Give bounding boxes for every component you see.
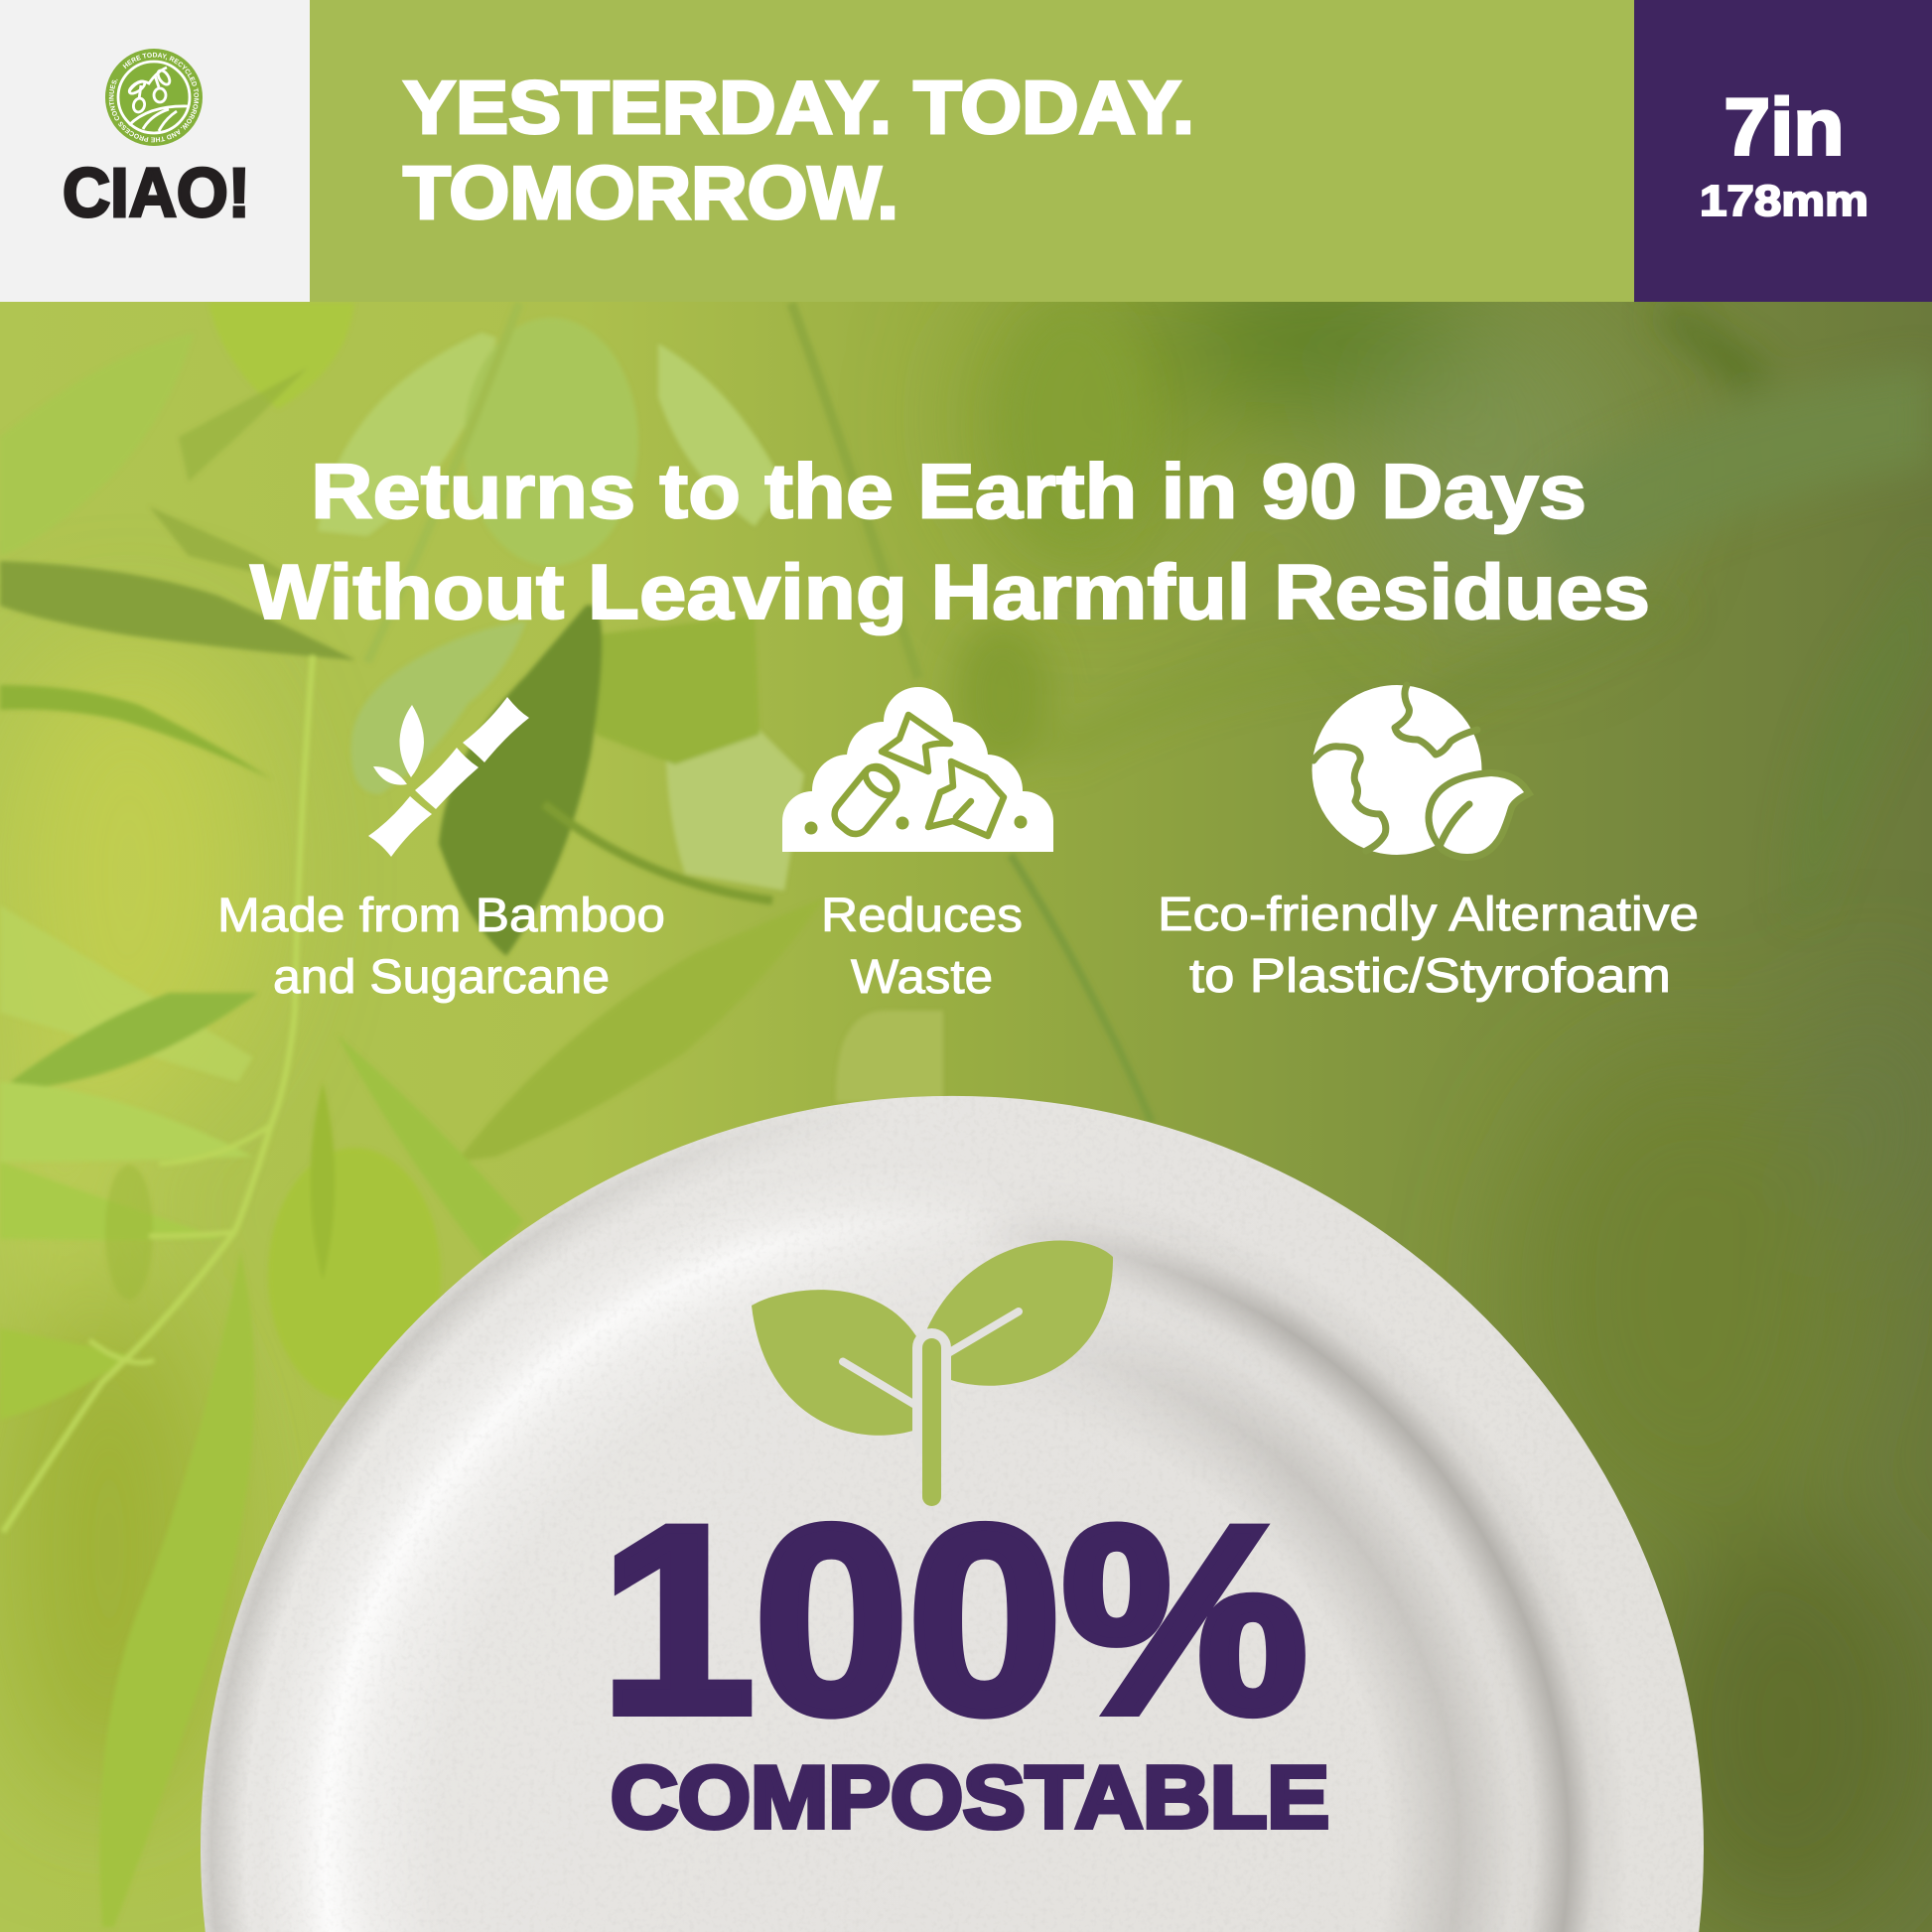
main heading: Returns to the Earth in 90 Days [311,447,1587,534]
label: made from bamboo and sugarcane: Made from Bamboo [217,890,665,942]
logo badge: HERE TODAY, RECYCLED TOMORROW. AND THE PROCESS CONTINUES. [109,52,199,143]
header panel: slogan: YESTERDAY. TODAY. [403,66,1194,149]
main heading: Without Leaving Harmful Residues [250,548,1650,635]
header panel: size badge [1634,0,1932,302]
icon: compost waste pile [782,687,1053,852]
label: compostable: COMPOSTABLE [611,1747,1329,1847]
label: made from bamboo and sugarcane [217,890,665,1004]
label: eco-friendly alternative: Eco-friendly Alternative [1158,889,1699,941]
header panel: logo [0,0,310,302]
header panel: size badge: 7in [1724,83,1845,173]
header panel: slogan [310,0,1634,302]
label: reduces waste: Reduces [821,890,1023,942]
label: reduces waste: Waste [851,951,993,1004]
big figure: 100%: 100% [601,1470,1308,1768]
header panel: slogan: TOMORROW. [403,151,898,234]
label: eco-friendly alternative [1158,889,1699,1003]
label: made from bamboo and sugarcane: and Sugarcane [273,951,610,1004]
label: reduces waste [821,890,1023,1004]
logo wordmark: CIAO! [63,154,250,231]
icon: globe with leaf [1312,685,1524,855]
icon: bamboo [368,697,529,857]
label: eco-friendly alternative: to Plastic/Styrofoam [1189,950,1671,1003]
main heading [250,447,1650,635]
header panel: size badge: 178mm [1700,177,1868,225]
icon: sprout [752,1241,1113,1506]
bagasse plate [199,1092,1708,1932]
